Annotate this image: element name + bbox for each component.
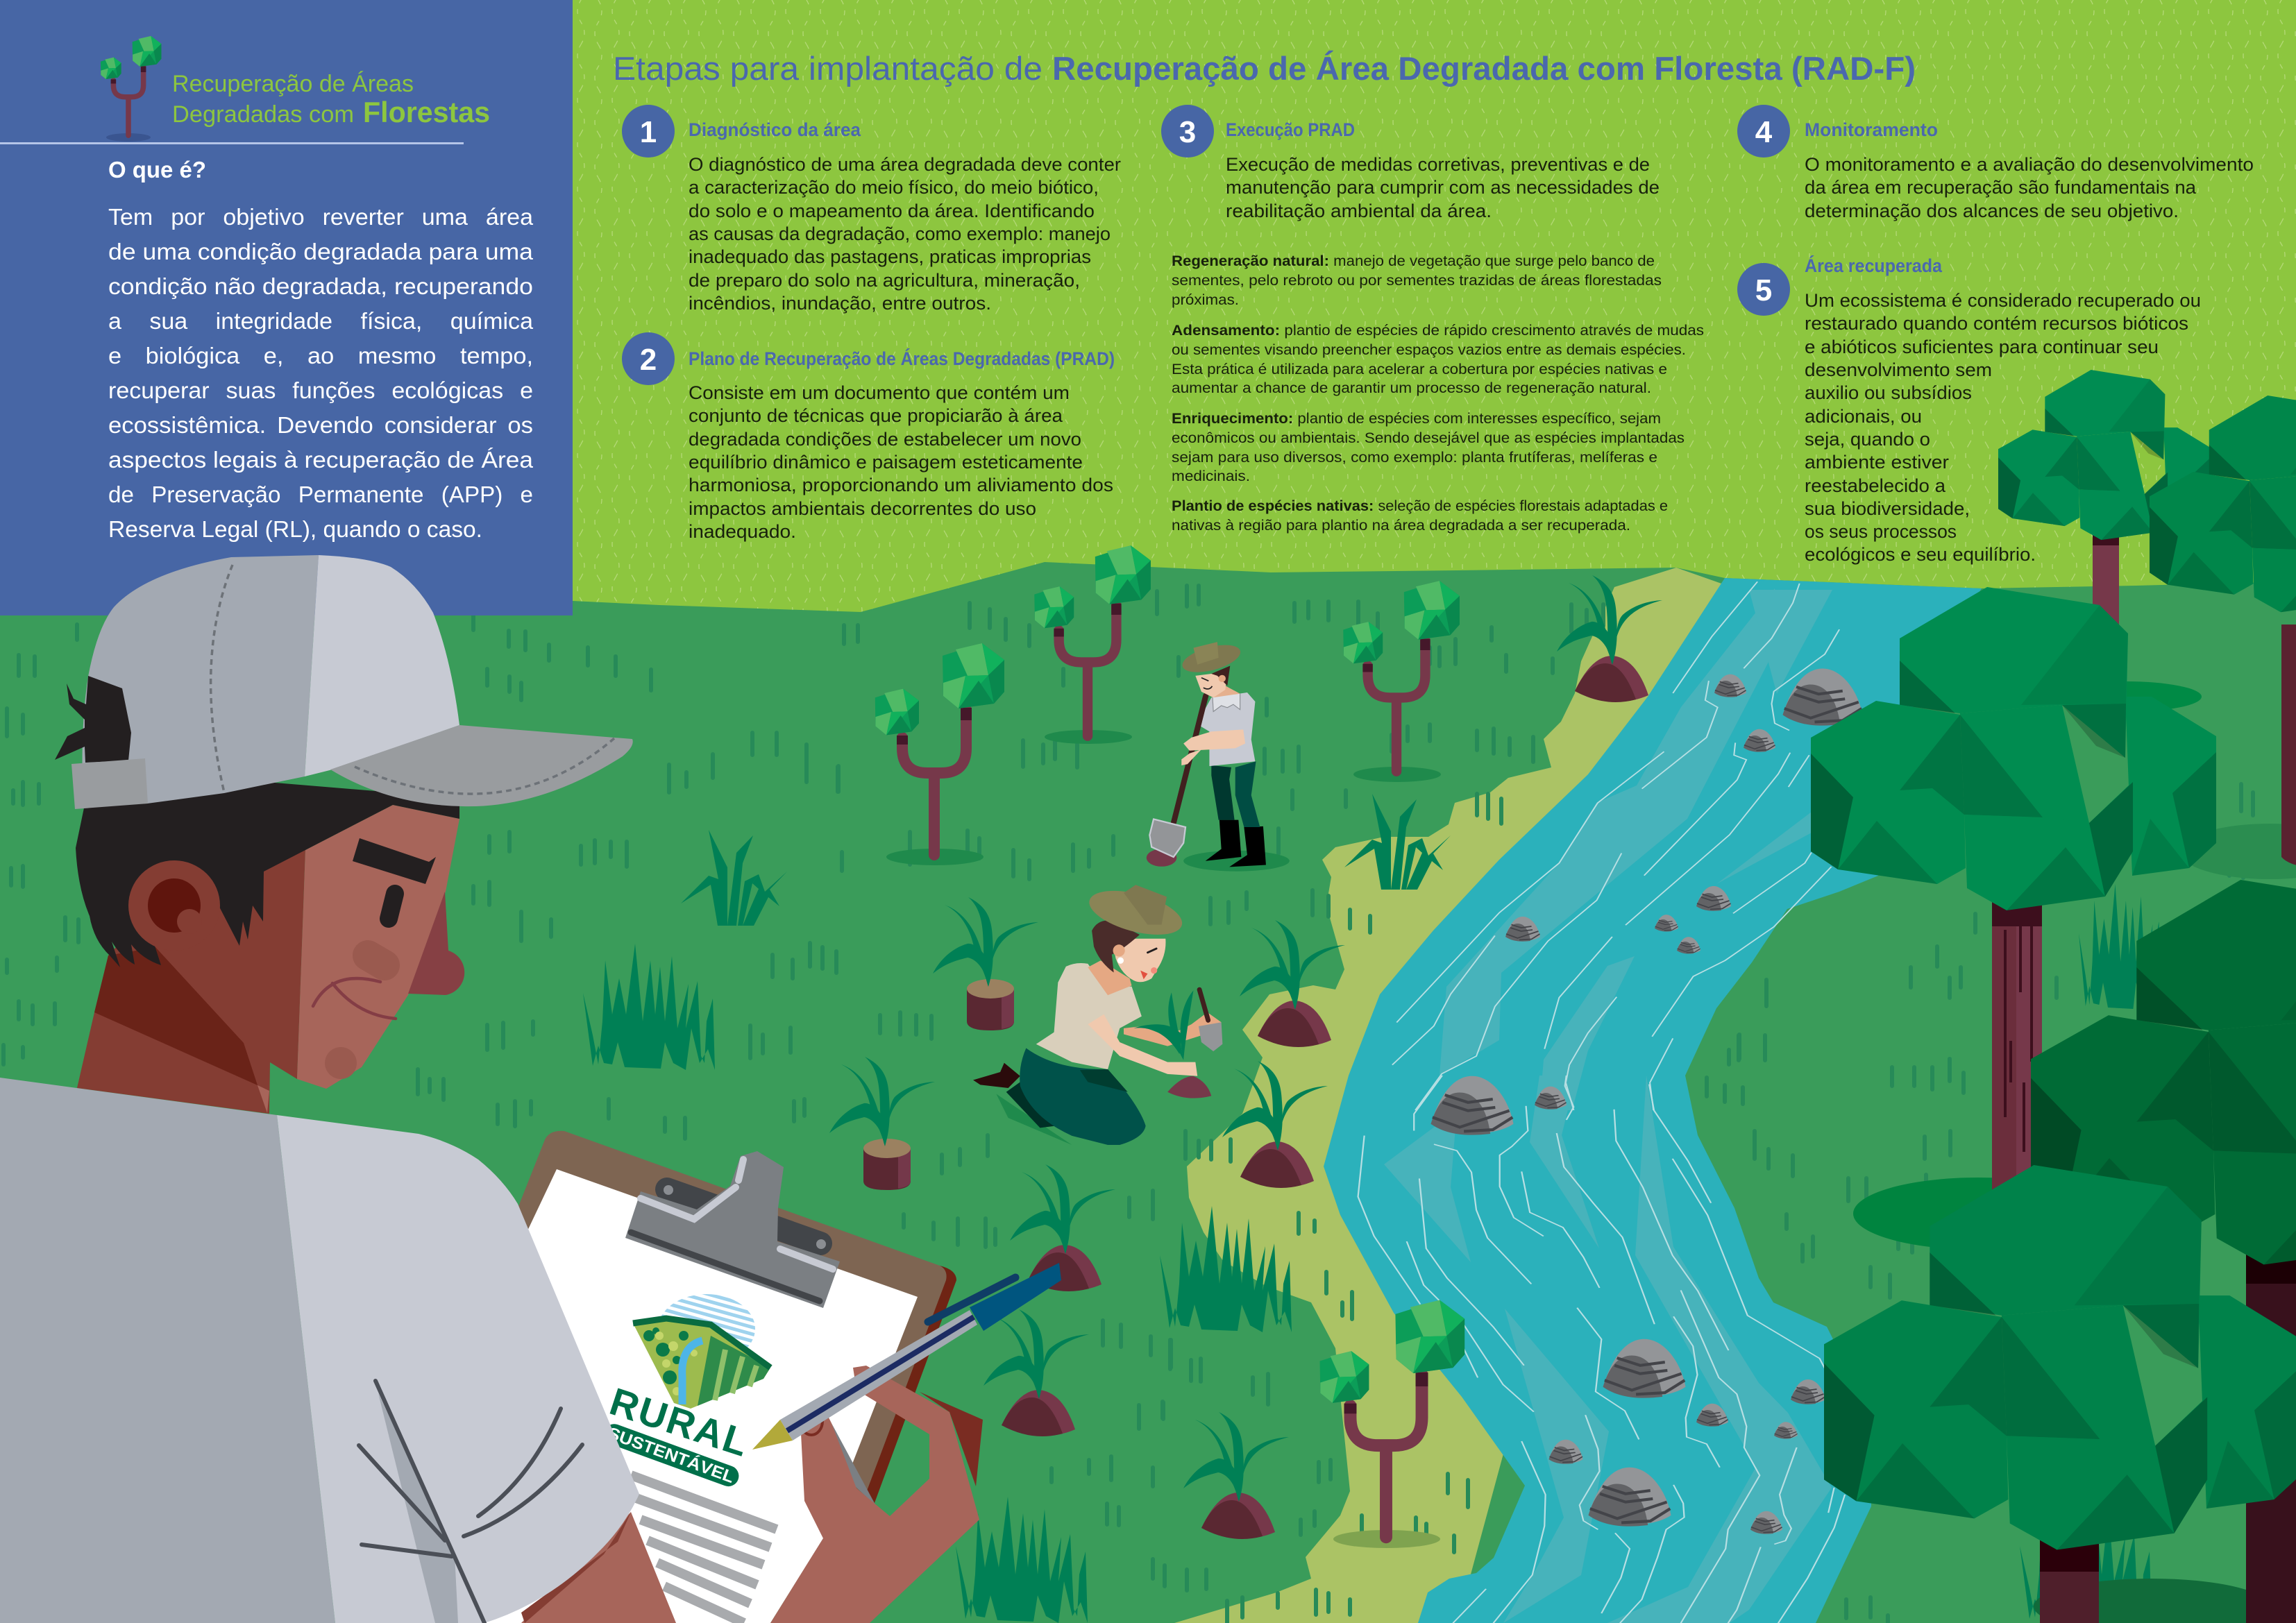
step 3: Execução de medidas corretivas, preventivas e de — [1226, 154, 1650, 175]
step 1 — [622, 105, 1121, 314]
technique list: Plantio de espécies nativas: seleção de espécies florestais adaptadas e — [1172, 498, 1668, 514]
face — [297, 805, 459, 1089]
panel paragraph: recuperar suas funções ecológicas e — [108, 377, 533, 403]
step 5: restaurado quando contém recursos bióticos — [1805, 313, 2188, 334]
technique list: próximas. — [1172, 291, 1239, 308]
step 5: seja, quando o — [1805, 429, 1930, 450]
technique list: Regeneração natural: manejo de vegetação que surge pelo banco de — [1172, 253, 1655, 269]
cap — [83, 555, 633, 806]
step 5: Área recuperada — [1805, 255, 1943, 276]
panel paragraph: de uma condição degradada para uma — [108, 239, 534, 264]
forearm — [521, 1512, 676, 1623]
step 3: Execução PRAD — [1226, 119, 1355, 140]
step 1: 1 — [640, 115, 657, 149]
logo wordmark: Recuperação de Áreas — [172, 71, 414, 97]
step 3: reabilitação ambiental da área. — [1226, 201, 1492, 221]
step 1: do solo e o mapeamento da área. Identificando — [689, 201, 1095, 221]
tree middle — [1811, 587, 2216, 1190]
step 1: O diagnóstico de uma área degradada deve conter — [689, 154, 1121, 175]
river rocks — [1431, 669, 1863, 1534]
step 1: incêndios, inundação, entre outros. — [689, 293, 991, 314]
panel paragraph: condição não degradada, recuperando — [108, 273, 533, 299]
river — [1324, 578, 1982, 1623]
step 2: Consiste em um documento que contém um — [689, 382, 1070, 403]
title — [613, 50, 1916, 87]
technique list: sejam para uso diversos, como exemplo: planta frutíferas, melíferas e — [1172, 449, 1657, 466]
step 2: conjunto de técnicas que propiciarão à área — [689, 405, 1063, 426]
tree bottom — [1824, 1165, 2296, 1623]
seedlings in pots and mounds — [829, 575, 1662, 1539]
panel heading: O que é? — [108, 157, 206, 182]
clip — [625, 1151, 840, 1308]
paper — [451, 1169, 918, 1623]
step 4 — [1737, 105, 2254, 221]
tree top right — [2150, 396, 2296, 867]
pen — [752, 1263, 1061, 1450]
rural sustentavel logo: SUSTENTÁVEL — [605, 1423, 737, 1487]
step 2: equilíbrio dinâmico e paisagem esteticamente — [689, 452, 1083, 473]
step 3: 3 — [1179, 115, 1196, 149]
technique list — [1172, 253, 1704, 534]
cap strap — [71, 758, 148, 809]
logo tree icon — [101, 36, 161, 142]
step 5: desenvolvimento sem — [1805, 359, 1992, 380]
step 2: degradada condições de estabelecer um novo — [689, 429, 1081, 450]
step 4: determinação dos alcances de seu objetivo. — [1805, 201, 2179, 221]
man: reviewing clipboard — [0, 555, 676, 1623]
paper lines — [631, 1475, 777, 1623]
nose — [408, 892, 464, 995]
step 5: ecológicos e seu equilíbrio. — [1805, 544, 2036, 565]
grass ticks — [3, 586, 2253, 1623]
shirt — [0, 1078, 639, 1623]
step 2 — [622, 332, 1115, 542]
panel paragraph — [108, 204, 534, 542]
step 5: e abióticos suficientes para continuar seu — [1805, 337, 2159, 357]
clipboard — [451, 1131, 956, 1623]
technique list: Esta prática é utilizada para acelerar a cobertura por espécies nativas e — [1172, 361, 1667, 377]
young trees — [875, 545, 1464, 1548]
worker kneeling planting — [973, 883, 1222, 1145]
step 3 — [1161, 105, 1704, 534]
step 5: adicionais, ou — [1805, 406, 1922, 427]
technique list: medicinais. — [1172, 468, 1250, 484]
step 4: da área em recuperação são fundamentais na — [1805, 177, 2197, 198]
grass tufts — [583, 794, 2171, 1623]
panel paragraph: Reserva Legal (RL), quando o caso. — [108, 516, 482, 542]
land: green terrain — [0, 562, 2296, 1623]
panel: o que e — [0, 0, 573, 615]
step 5: 5 — [1755, 273, 1772, 307]
step 5: auxilio ou subsídios — [1805, 382, 1972, 403]
background forest trees — [1811, 370, 2296, 1623]
tree top small — [1998, 370, 2211, 624]
panel paragraph: e biológica e, ao mesmo tempo, — [108, 343, 533, 368]
title: Etapas para implantação de — [613, 50, 1043, 87]
technique list: nativas à região para plantio na área degradada a ser recuperada. — [1172, 517, 1630, 534]
ear — [128, 860, 220, 951]
logo wordmark — [172, 71, 490, 128]
technique list: aumentar a chance de garantir um processo de regeneração natural. — [1172, 380, 1651, 396]
technique list: Adensamento: plantio de espécies de rápido crescimento através de mudas — [1172, 322, 1704, 339]
technique list: econômicos ou ambientais. Sendo desejável que as espécies implantadas — [1172, 430, 1685, 446]
mouth — [313, 978, 396, 1019]
river bank — [1174, 568, 1735, 1623]
step 1: as causas da degradação, como exemplo: manejo — [689, 223, 1111, 244]
rural sustentavel logo — [609, 1294, 773, 1486]
cheek — [368, 955, 385, 965]
step 1: inadequado das pastagens, praticas improprias — [689, 246, 1091, 267]
step 2: harmoniosa, proporcionando um aliviamento dos — [689, 475, 1113, 495]
panel paragraph: ecossistêmica. Devendo considerar os — [108, 412, 533, 438]
step 4: 4 — [1755, 115, 1773, 149]
step 5: Um ecossistema é considerado recuperado ou — [1805, 290, 2201, 311]
hair tuft — [55, 676, 131, 763]
rural sustentavel logo: RURAL — [605, 1379, 754, 1465]
eyebrow — [353, 838, 436, 884]
step 5: os seus processos — [1805, 521, 1957, 542]
step 2: Plano de Recuperação de Áreas Degradadas (PRAD) — [689, 348, 1115, 369]
panel paragraph: Tem por objetivo reverter uma área — [108, 204, 534, 230]
step 1: Diagnóstico da área — [689, 119, 861, 140]
neck and jaw — [77, 847, 305, 1114]
step 1: a caracterização do meio físico, do meio biótico, — [689, 177, 1099, 198]
step 2: inadequado. — [689, 521, 796, 542]
step 1: de preparo do solo na agricultura, mineração, — [689, 270, 1080, 291]
panel paragraph: a sua integridade física, química — [108, 308, 534, 334]
technique list: Enriquecimento: plantio de espécies com interesses específico, sejam — [1172, 410, 1661, 427]
eye — [389, 894, 395, 919]
technique list: ou sementes visando preencher espaços vazios entre as demais espécies. — [1172, 341, 1686, 358]
panel paragraph: aspectos legais à recuperação de Área — [108, 447, 534, 473]
tree right dark — [2031, 880, 2296, 1623]
title: Recuperação de Área Degradada com Floresta (RAD-F) — [1052, 50, 1916, 87]
step 5: sua biodiversidade, — [1805, 498, 1970, 519]
hair — [76, 777, 459, 967]
hand holding pen — [752, 1263, 1061, 1623]
step 4: Monitoramento — [1805, 119, 1938, 140]
step 3: manutenção para cumprir com as necessidades de — [1226, 177, 1660, 198]
step 5 — [1737, 255, 2201, 565]
logo wordmark: Florestas — [363, 96, 490, 128]
worker with shovel — [1147, 640, 1290, 872]
technique list: sementes, pelo rebroto ou por sementes trazidas de áreas florestadas — [1172, 272, 1662, 289]
step 5: reestabelecido a — [1805, 475, 1946, 496]
step 4: O monitoramento e a avaliação do desenvolvimento — [1805, 154, 2254, 175]
step 5: ambiente estiver — [1805, 452, 1949, 473]
panel paragraph: de Preservação Permanente (APP) e — [108, 482, 533, 507]
step 2: impactos ambientais decorrentes do uso — [689, 498, 1036, 519]
step 2: 2 — [640, 343, 657, 377]
logo wordmark: Degradadas com — [172, 101, 354, 128]
